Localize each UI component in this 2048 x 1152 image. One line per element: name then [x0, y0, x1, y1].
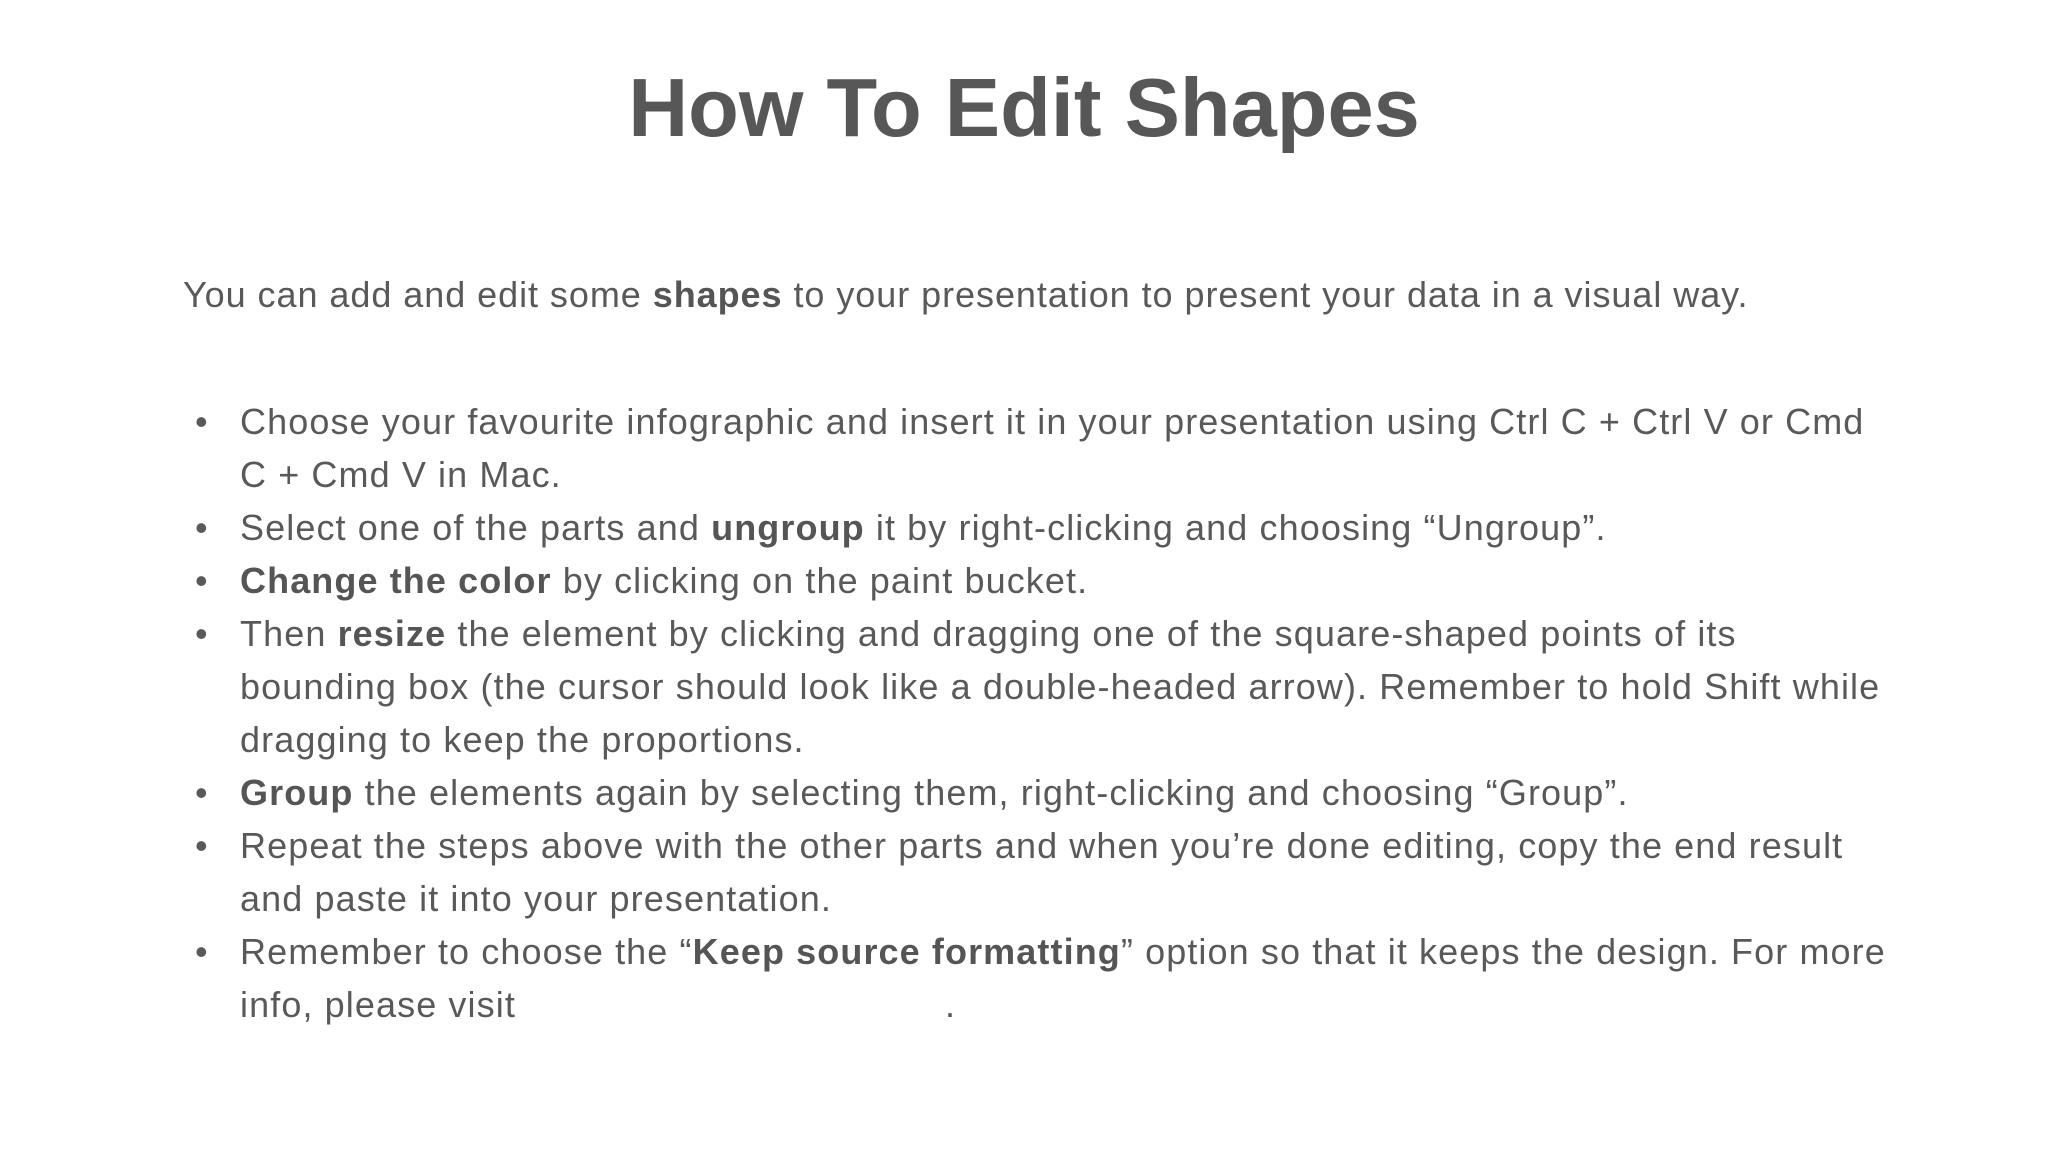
bullet 7: Remember to choose the “Keep source formatting” option so that it keeps the design. For more — [240, 931, 1886, 972]
bullet 1: • — [195, 401, 209, 442]
bullet 6: and paste it into your presentation. — [240, 878, 832, 919]
bullet 1: C + Cmd V in Mac. — [240, 454, 562, 495]
bullet 7 — [195, 931, 1886, 1025]
bullet 6: • — [195, 825, 209, 866]
bullet 4: • — [195, 613, 209, 654]
bullet 6 — [195, 825, 1843, 919]
bullet 7: info, please visit . — [240, 984, 956, 1025]
intro text: You can add and edit some shapes to your presentation to present your data in a visual way. — [183, 274, 1748, 315]
bullet 4: dragging to keep the proportions. — [240, 719, 805, 760]
bullet list — [195, 401, 1886, 1025]
bullet 6: Repeat the steps above with the other parts and when you’re done editing, copy the end result — [240, 825, 1843, 866]
bullet 4: Then resize the element by clicking and dragging one of the square-shaped points of its — [240, 613, 1737, 654]
bullet 5: • — [195, 772, 209, 813]
bullet 4 — [195, 613, 1880, 760]
bullet 1 — [195, 401, 1864, 495]
title: How To Edit Shapes — [628, 61, 1420, 154]
bullet 7: • — [195, 931, 209, 972]
bullet 5: Group the elements again by selecting them, right-clicking and choosing “Group”. — [240, 772, 1629, 813]
bullet 2: • — [195, 507, 209, 548]
bullet 4: bounding box (the cursor should look like a double-headed arrow). Remember to hold Shift while — [240, 666, 1880, 707]
bullet 2: Select one of the parts and ungroup it by right-clicking and choosing “Ungroup”. — [240, 507, 1607, 548]
bullet 1: Choose your favourite infographic and insert it in your presentation using Ctrl C + Ctrl V or Cmd — [240, 401, 1864, 442]
bullet 3: • — [195, 560, 209, 601]
bullet 3: Change the color by clicking on the paint bucket. — [240, 560, 1088, 601]
